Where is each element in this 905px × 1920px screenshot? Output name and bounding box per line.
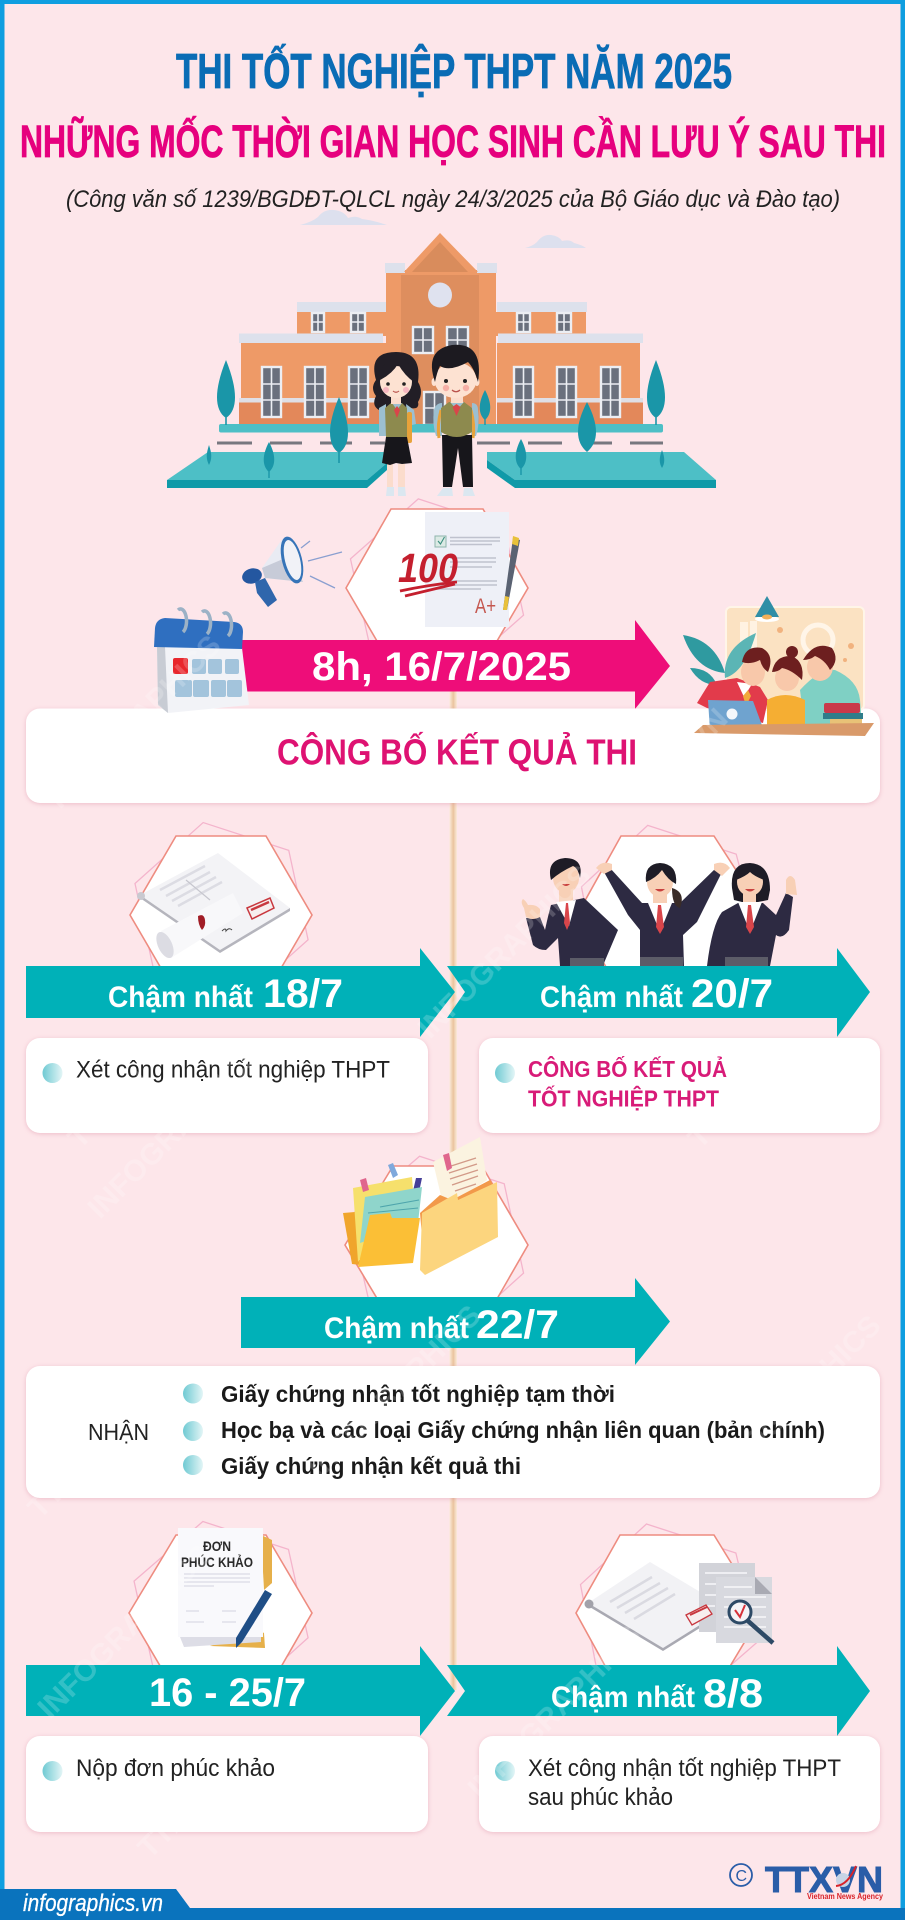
arrow: Chậm nhất 22/7 (241, 1278, 670, 1365)
card: graduation results announced: TỐT NGHIỆP THPT (528, 1084, 719, 1112)
logo: TTXVN: C (736, 1868, 747, 1885)
bullet (183, 1421, 203, 1441)
subtitle: document reference: (Công văn số 1239/BGDĐT-QLCL ngày 24/3/2025 của Bộ Giáo dục và Đào tạo) (66, 186, 840, 213)
icon: three celebrating graduates (522, 858, 797, 966)
logo: TTXVN: TTXVN (765, 1859, 883, 1900)
card: submit appeal (26, 1736, 428, 1832)
arrow: Chậm nhất 8/8: Chậm nhất (551, 1681, 695, 1714)
icon: students at laptop (683, 596, 874, 736)
icon: appeal form: PHÚC KHẢO (181, 1553, 253, 1570)
bullet (42, 1063, 62, 1083)
icon: appeal form (178, 1528, 272, 1648)
watermark: TTXVN (62, 1062, 154, 1155)
arrow: Chậm nhất 18/7 (26, 948, 455, 1037)
illustration: school with students (167, 210, 716, 496)
bullet (495, 1063, 515, 1083)
card: graduation results announced: CÔNG BỐ KẾT QUẢ (528, 1054, 727, 1082)
card: recognition after appeal (479, 1736, 880, 1832)
section 4 left hexagon backdrop (109, 1507, 332, 1714)
arrow: Chậm nhất 20/7: Chậm nhất (540, 981, 683, 1014)
watermark (22, 629, 888, 1865)
icon: calendar (154, 609, 249, 713)
arrow: Chậm nhất 18/7: 18/7 (263, 972, 343, 1016)
timeline vertical line (450, 690, 457, 1690)
icon: diploma and certificate (137, 853, 290, 961)
graduate: man (522, 858, 618, 966)
watermark: INFOGRAPHICS (82, 1039, 268, 1225)
icon: exam paper with 100 score: 100 (398, 545, 458, 591)
watermark: TTXVN (682, 1062, 774, 1155)
section 1 hexagon backdrop (326, 485, 548, 689)
bullet (495, 1761, 515, 1781)
card: recognition after appeal: sau phúc khảo (528, 1784, 673, 1811)
bullet (42, 1761, 62, 1781)
icon: certificate under review (584, 1562, 773, 1651)
arrow: Chậm nhất 20/7: 20/7 (691, 972, 773, 1016)
pink arrow: 8h, 16/7/2025 (242, 620, 670, 709)
watermark: INFOGRAPHICS (42, 629, 228, 815)
bullet (183, 1455, 203, 1475)
graduate: woman with raised hand (707, 863, 797, 966)
card: documents to receive: Học bạ và các loại Giấy chứng nhận liên quan (bản chính) (221, 1417, 825, 1443)
section 2 left hexagon backdrop (111, 808, 332, 1015)
arrow: Chậm nhất 22/7: 22/7 (476, 1303, 559, 1347)
arrow: 16 - 25/7: 16 - 25/7 (149, 1671, 306, 1715)
arrow: Chậm nhất 20/7 (447, 948, 870, 1037)
icon: megaphone (240, 534, 342, 607)
section 4 right hexagon backdrop (556, 1510, 782, 1718)
card: exam results announcement (26, 708, 880, 803)
card: graduation recognition (26, 1038, 428, 1133)
watermark: TTXVN (132, 1772, 224, 1865)
card: submit appeal: Nộp đơn phúc khảo (76, 1755, 275, 1782)
bullet (183, 1384, 203, 1404)
arrow: Chậm nhất 18/7: Chậm nhất (108, 981, 253, 1014)
card: graduation recognition: Xét công nhận tốt nghiệp THPT (76, 1056, 390, 1084)
watermark: INFOGRAPHICS (702, 1309, 888, 1495)
arrow: Chậm nhất 22/7: Chậm nhất (324, 1312, 469, 1345)
card: documents to receive: NHẬN (88, 1419, 149, 1445)
icon: exam paper with 100 score (398, 512, 520, 627)
watermark: INFOGRAPHICS (462, 1619, 648, 1805)
pink arrow: 8h, 16/7/2025: 8h, 16/7/2025 (312, 645, 571, 689)
section 3 hexagon backdrop (325, 1141, 548, 1349)
watermark: TTXVN (642, 702, 734, 795)
card: graduation results announced (479, 1038, 880, 1133)
card: exam results announcement: CÔNG BỐ KẾT QUẢ THI (277, 730, 637, 772)
card: documents to receive (26, 1366, 880, 1498)
watermark: TTXVN (22, 1432, 114, 1525)
icon: exam paper with 100 score: A+ (475, 595, 496, 618)
watermark: INFOGRAPHICS (412, 859, 598, 1045)
watermark: INFOGRAPHICS (302, 1299, 488, 1485)
arrow: 16 - 25/7 (26, 1646, 455, 1736)
logo: TTXVN: Vietnam News Agency (807, 1892, 883, 1901)
card: documents to receive: Giấy chứng nhận tốt nghiệp tạm thời (221, 1381, 615, 1407)
section 2 right hexagon backdrop (557, 812, 785, 1020)
arrow: Chậm nhất 8/8 (447, 1646, 870, 1736)
icon: appeal form: ĐƠN (203, 1538, 231, 1554)
icon: document folders (343, 1137, 498, 1275)
boy student (432, 345, 480, 496)
footer tab: infographics.vn: infographics.vn (23, 1890, 163, 1917)
card: documents to receive: Giấy chứng nhận kết quả thi (221, 1453, 521, 1479)
watermark: INFOGRAPHICS (32, 1539, 218, 1725)
girl student (373, 352, 421, 496)
arrow: Chậm nhất 8/8: 8/8 (703, 1672, 763, 1716)
graduate: woman with raised arms (596, 863, 730, 966)
card: recognition after appeal: Xét công nhận tốt nghiệp THPT (528, 1755, 841, 1782)
